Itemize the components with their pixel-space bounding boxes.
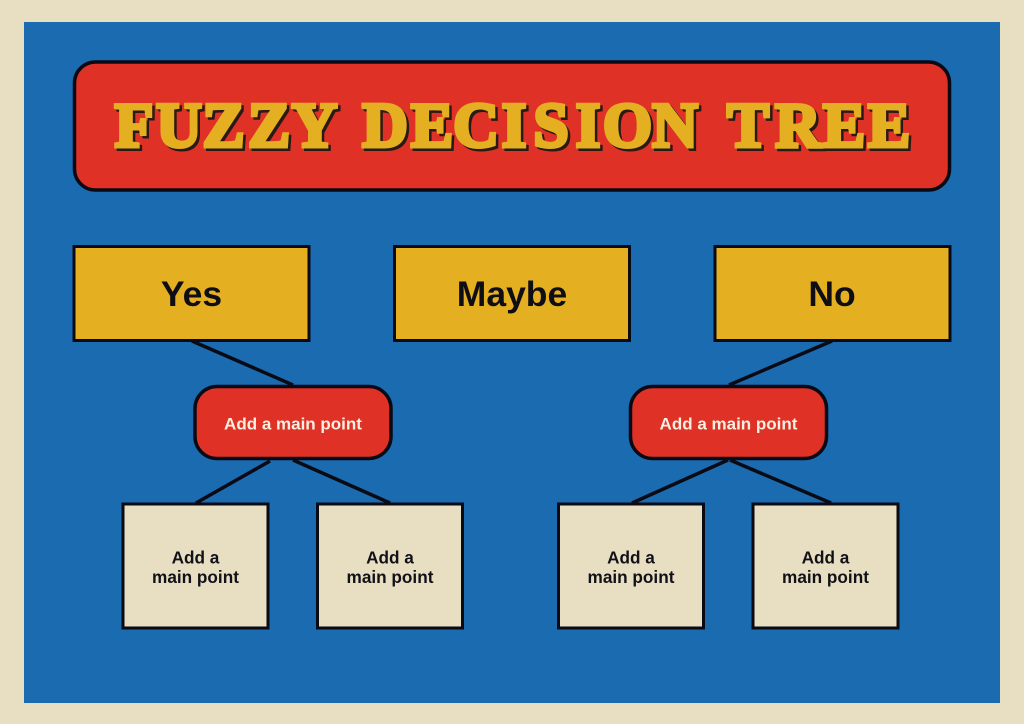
title shadow: FUZZY DECISION TREE	[117, 93, 913, 163]
leaf box 4	[753, 504, 898, 628]
leaf box 2: Add a	[366, 548, 414, 568]
leaf box 1: Add a	[172, 548, 220, 568]
leaf box 4: main point	[782, 567, 869, 587]
node: right main point	[630, 386, 826, 458]
node: right main point: Add a main point	[660, 414, 798, 434]
leaf box 1	[123, 504, 268, 628]
box: Maybe	[394, 246, 630, 340]
leaf box 2: main point	[347, 567, 434, 587]
connector: No to right main point	[729, 341, 832, 385]
leaf box 3	[558, 504, 704, 628]
title: FUZZY DECISION TREE	[115, 90, 910, 160]
leaf box 3: main point	[588, 567, 675, 587]
connector: left main point to box 1	[196, 461, 270, 503]
leaf box 4: Add a	[802, 548, 850, 568]
box: No: No	[808, 274, 856, 314]
connector: left main point to box 2	[293, 460, 390, 503]
box: Maybe: Maybe	[457, 274, 567, 314]
leaf box 1: main point	[152, 567, 239, 587]
node: left main point: Add a main point	[224, 414, 362, 434]
box: Yes: Yes	[161, 274, 222, 314]
connector: Yes to left main point	[192, 341, 293, 385]
title banner	[74, 62, 950, 190]
box: Yes	[74, 246, 309, 340]
leaf box 2	[318, 504, 462, 628]
leaf box 3: Add a	[607, 548, 655, 568]
node: left main point	[195, 386, 391, 458]
connector: right main point to box 4	[730, 460, 831, 503]
box: No	[715, 246, 950, 340]
connector: right main point to box 3	[632, 460, 728, 503]
